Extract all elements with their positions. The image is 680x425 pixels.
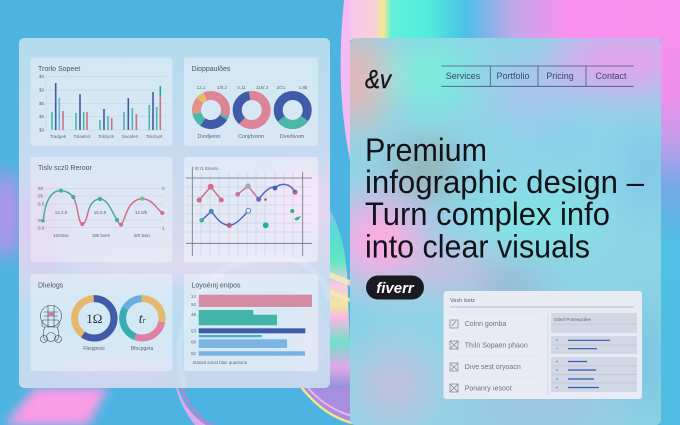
nav labels: Services xyxy=(446,71,481,81)
axis labels: Tolclysti xyxy=(98,134,114,139)
donut 1 xyxy=(196,96,226,124)
donut labels: 2/21 xyxy=(277,85,286,90)
donut captions: Bfocpgeta xyxy=(131,346,153,352)
axes xyxy=(186,167,312,256)
checklist rows xyxy=(450,313,540,392)
bar labels and note: 82 xyxy=(191,351,197,356)
grid xyxy=(186,172,312,256)
donut labels: 1.8b xyxy=(299,85,308,90)
blue series xyxy=(199,184,295,228)
donut 3 xyxy=(278,96,307,124)
nav labels: Contact xyxy=(595,71,627,81)
logo: &v xyxy=(365,64,393,94)
side table xyxy=(548,313,637,394)
line chart labels: 18k bxen xyxy=(92,233,111,238)
checklist rows: Ponanry ıesoot xyxy=(465,386,512,392)
heading: diagrams: Dlıelogs xyxy=(38,282,64,290)
card: donut charts xyxy=(184,58,318,146)
pink series xyxy=(197,183,298,203)
table heading: Vash lsetz xyxy=(450,298,475,304)
icon: robot doodle xyxy=(40,305,62,342)
card: line chart xyxy=(30,157,172,262)
line chart labels: 1 xyxy=(162,226,165,231)
bar labels and note: 50 xyxy=(191,302,197,307)
axis labels: $0 xyxy=(39,128,45,132)
bars xyxy=(199,295,312,356)
checklist rows: Thıln Sopaen phaon xyxy=(465,342,528,350)
checklist rows: Dıve sest oryoacn xyxy=(465,364,521,371)
axis labels: $0 xyxy=(39,74,45,79)
panel: hero xyxy=(350,38,661,425)
axis labels: Tolozyet xyxy=(146,134,163,139)
navigation xyxy=(441,66,634,86)
line chart labels: 0.5 xyxy=(38,202,45,206)
axis labels: Tradgeti xyxy=(50,134,66,139)
badge: fiverr xyxy=(366,276,424,300)
data points xyxy=(42,189,164,227)
line chart labels: 05 xyxy=(38,194,44,198)
donut captions xyxy=(83,346,153,352)
donut labels: 12.1 xyxy=(197,85,206,90)
bar labels and note: 14 xyxy=(191,294,197,299)
line chart labels: 12.0/k xyxy=(135,210,148,215)
axis labels: $0 xyxy=(39,114,45,119)
badge: fiverr: fiverr xyxy=(376,280,415,297)
line chart labels: 0 xyxy=(162,186,165,191)
axis labels: $5 xyxy=(39,101,45,106)
line chart labels: 9/0 bsin xyxy=(134,233,150,238)
headline xyxy=(365,132,645,264)
iridescent ribbon between panels xyxy=(176,0,352,425)
heading: horizontal bars: Loyoéınj enipos xyxy=(192,282,241,290)
panel: dashboards xyxy=(19,38,330,388)
bar labels and note: 48 xyxy=(191,312,197,317)
donut labels xyxy=(197,85,308,140)
line chart labels: 50 xyxy=(38,186,44,191)
nav labels: Pricing xyxy=(546,71,574,81)
card: horizontal bars xyxy=(184,274,318,371)
donut labels: Dvedivum xyxy=(280,134,305,140)
headline: into clear visuals xyxy=(365,228,590,264)
heading: scatter chart: /0 /1 itzeoro xyxy=(195,166,219,171)
top right holographic field xyxy=(345,0,680,425)
heading: bar chart: Trorlo Sopeet xyxy=(38,66,80,73)
bar labels and note: 53 xyxy=(191,328,197,334)
headline: infographic design – xyxy=(365,164,645,200)
grid lines xyxy=(44,188,163,228)
teal dots xyxy=(263,209,301,228)
donut 2 xyxy=(237,95,266,124)
axis labels xyxy=(39,74,163,139)
donut labels: 116/.3 xyxy=(256,85,269,90)
card: scatter grid chart xyxy=(184,157,318,262)
nav labels: Portfolio xyxy=(496,71,530,81)
heading: line chart: Tislv scz0 Reroor xyxy=(38,165,92,172)
axis labels: Tolaetrol xyxy=(73,134,91,139)
card: donut pair with mascot xyxy=(30,274,172,371)
headline: Premium xyxy=(365,132,487,168)
line chart labels: 15.0.9 xyxy=(94,210,107,215)
line chart labels: 12.2.0 xyxy=(55,210,68,215)
side table: Oderl Ponesoctlee xyxy=(554,317,592,322)
line chart labels xyxy=(38,186,165,238)
headline: Turn complex info xyxy=(365,196,610,232)
nav labels xyxy=(446,71,627,81)
grid lines xyxy=(46,76,166,130)
donut left value: 1Ω xyxy=(86,311,102,326)
donut labels: 0.11 xyxy=(237,85,246,90)
donut left xyxy=(75,299,114,338)
card: checklist table xyxy=(444,291,642,399)
donut labels: 1/0.2 xyxy=(217,85,227,90)
axis labels: Suoslen xyxy=(122,134,139,139)
line series xyxy=(43,191,162,225)
donut captions: Fleıpjesio xyxy=(83,346,105,352)
bars xyxy=(52,83,160,130)
heading: donut charts: Dioppaulões xyxy=(192,66,231,73)
bar labels and note: 68 xyxy=(191,340,197,344)
bar labels and note xyxy=(191,294,248,365)
donut labels: Conjdvonn xyxy=(238,134,264,140)
donut right xyxy=(123,299,162,338)
donut labels: Diodjeinn xyxy=(198,134,220,140)
checklist rows: Colnn gomba xyxy=(465,321,506,328)
line chart labels: 05 xyxy=(38,218,44,223)
bar labels and note: Dasott soost blaz quastons xyxy=(193,360,248,365)
donut right value: tr xyxy=(139,312,147,327)
card: bar chart xyxy=(30,58,172,146)
line chart labels: 10ctbse xyxy=(53,233,69,238)
line chart labels: 0.0 xyxy=(38,226,45,230)
axis labels: $0 xyxy=(39,88,45,92)
